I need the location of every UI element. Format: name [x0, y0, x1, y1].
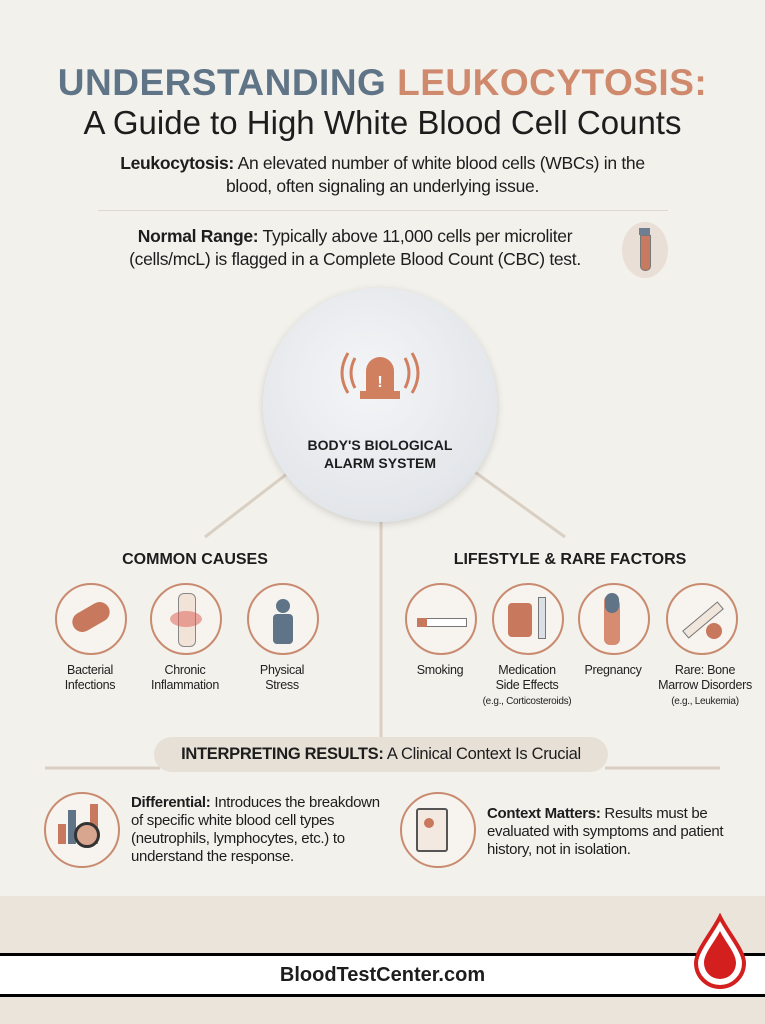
heading: lifestyle: LIFESTYLE & RARE FACTORS [454, 551, 686, 568]
interpreting banner [154, 737, 608, 772]
text: context matters: Context Matters: Results must be evaluated with symptoms and patient history, not in isolation. [487, 805, 723, 858]
label: stress [260, 663, 304, 692]
title: A Guide to High White Blood Cell Counts [84, 104, 681, 141]
icon: blood drop [694, 913, 746, 989]
icon: bone [666, 583, 738, 655]
label: medication: (e.g., Corticosteroids) [483, 696, 571, 707]
footer: website [0, 953, 765, 997]
central circle: alarm system [263, 288, 497, 522]
icon: pregnancy [578, 583, 650, 655]
label: medication: Side Effects [496, 678, 558, 692]
title [58, 62, 707, 141]
label: bone marrow: Marrow Disorders [658, 678, 752, 692]
label: smoking: Smoking [417, 663, 463, 677]
footer: website: BloodTestCenter.com [280, 964, 485, 986]
text: differential: Differential: Introduces the breakdown of specific white blood cell types (neutrophils, lymphocytes, etc.) to understand the response. [131, 794, 380, 865]
label: bone marrow: Rare: Bone [675, 663, 735, 677]
icon: alarm: ! [377, 374, 383, 391]
label: inflammation: Inflammation [151, 678, 219, 692]
label: medication: Medication [498, 663, 556, 677]
alarm label: BODY'S BIOLOGICAL [308, 437, 452, 453]
title: UNDERSTANDING LEUKOCYTOSIS: [58, 62, 707, 103]
icon: alarm [340, 352, 420, 399]
label: medication [483, 663, 571, 707]
icon: joint [150, 583, 222, 655]
interpreting banner: INTERPRETING RESULTS: A Clinical Context Is Crucial [181, 745, 581, 763]
label: bacterial: Infections [65, 678, 115, 692]
label: bacterial [65, 663, 115, 692]
label: inflammation [151, 663, 219, 692]
label: stress: Physical [260, 663, 304, 677]
icon: medication [492, 583, 564, 655]
definition text: Leukocytosis: An elevated number of white blood cells (WBCs) in the blood, often signaling an underlying issue. [120, 153, 645, 196]
normal range text: Normal Range: Typically above 11,000 cells per microliter (cells/mcL) is flagged in a Complete Blood Count (CBC) test. [129, 226, 581, 269]
label: bone marrow: (e.g., Leukemia) [671, 696, 739, 707]
icon: bacteria [55, 583, 127, 655]
icon: smoking [405, 583, 477, 655]
icon: differential chart [44, 792, 120, 868]
label: bacterial: Bacterial [67, 663, 113, 677]
icon: test tube [622, 222, 668, 278]
alarm label [308, 437, 452, 471]
label: inflammation: Chronic [164, 663, 205, 677]
label: pregnancy: Pregnancy [584, 663, 642, 677]
icon: stress [247, 583, 319, 655]
footer band [0, 896, 765, 1024]
heading: common causes: COMMON CAUSES [122, 551, 268, 568]
label: bone marrow [658, 663, 752, 707]
label: stress: Stress [265, 678, 299, 692]
icon: clipboard [400, 792, 476, 868]
alarm label: ALARM SYSTEM [324, 455, 436, 471]
